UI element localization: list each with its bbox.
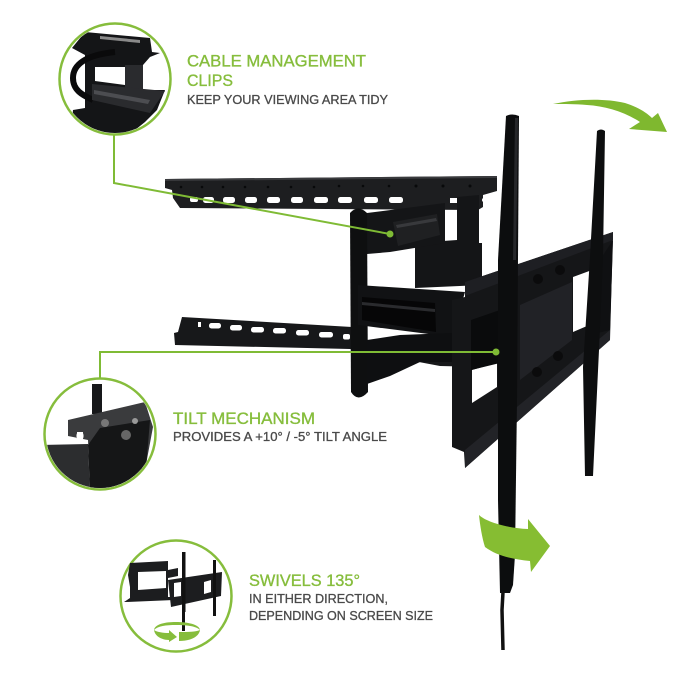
rear bracket plate	[415, 195, 482, 288]
arrow: top green swivel arrow	[553, 100, 667, 132]
panel: cable management detail circle	[60, 24, 170, 150]
callout line: cable clips	[114, 135, 394, 238]
heading: cable management clips: CABLE MANAGEMENT	[187, 52, 366, 70]
wall mount product	[165, 114, 613, 650]
callout line: tilt mechanism	[100, 348, 500, 380]
panel: tilt mechanism detail circle	[40, 378, 156, 490]
text: keep your viewing area tidy: KEEP YOUR VIEWING AREA TIDY	[187, 93, 389, 107]
heading: swivels 135 degrees: SWIVELS 135°	[249, 571, 360, 590]
text: swivel description: DEPENDING ON SCREEN SIZE	[249, 609, 433, 623]
text: swivel description	[249, 592, 433, 623]
text: tilt angle: PROVIDES A +10° / -5° TILT ANGLE	[173, 430, 387, 444]
lower arm	[358, 285, 465, 337]
panel: swivel detail circle	[120, 540, 232, 652]
diagonal arm	[367, 333, 452, 384]
main TV bracket plate	[452, 232, 613, 468]
top wall plate	[165, 176, 497, 210]
lower wall plate	[174, 317, 483, 367]
mini mount image	[124, 552, 222, 631]
right vertical TV rail	[583, 130, 605, 476]
heading: cable management clips	[187, 52, 366, 90]
power cable	[502, 592, 503, 650]
heading: tilt mechanism: TILT MECHANISM	[173, 409, 315, 428]
upper arm	[367, 203, 445, 254]
left vertical TV rail	[498, 114, 519, 593]
heading: cable management clips: CLIPS	[187, 71, 233, 90]
arrow: bottom green swivel arrow	[479, 515, 550, 572]
vertical hinge column	[350, 208, 368, 398]
text: swivel description: IN EITHER DIRECTION,	[249, 592, 388, 606]
icon: rotation arrows	[154, 622, 200, 642]
